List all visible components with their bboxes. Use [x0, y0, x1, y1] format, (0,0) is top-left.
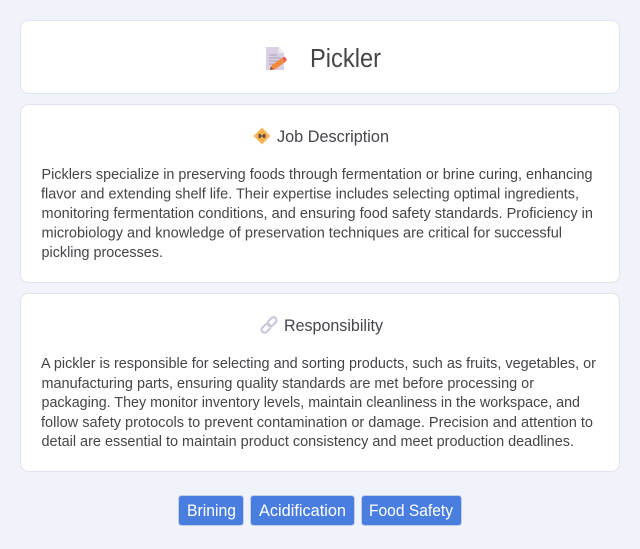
- heading: job description: Job Description: [277, 128, 389, 146]
- text block: job description: microbiology and knowledge of preservation techniques are critical for successful: [42, 226, 562, 242]
- text block: responsibility: packaging. They monitor inventory levels, maintain cleanliness in the workspace, and: [42, 395, 580, 411]
- tag: food safety: [362, 496, 462, 526]
- panel: job description: [20, 104, 620, 282]
- tag: food safety: Food Safety: [369, 501, 454, 520]
- text block: responsibility: [41, 356, 596, 450]
- text block: responsibility: detail are essential to maintain product consistency and meet production deadlines.: [42, 434, 574, 450]
- panel: title card: [20, 20, 620, 94]
- tag: brining: [178, 496, 244, 526]
- text block: job description: Picklers specialize in preserving foods through fermentation or brine curing, enhancing: [42, 167, 592, 183]
- tag: acidification: Acidification: [259, 501, 346, 520]
- panel: responsibility: [20, 294, 620, 472]
- tags row: [178, 496, 462, 526]
- icon: chain link: [260, 316, 278, 334]
- title: Pickler: [310, 45, 381, 73]
- heading: responsibility: Responsibility: [284, 317, 384, 335]
- tag: acidification: [250, 496, 354, 526]
- text block: responsibility: follow safety protocols to prevent contamination or damage. Precision and attention to: [41, 415, 593, 431]
- text block: job description: pickling processes.: [42, 245, 163, 261]
- text block: job description: flavor and extending shelf life. Their expertise includes selecting optimal ingredients,: [41, 186, 579, 202]
- text block: responsibility: manufacturing parts, ensuring quality standards are met before processing or: [42, 376, 534, 392]
- tag: brining: Brining: [187, 501, 236, 520]
- text block: responsibility: A pickler is responsible for selecting and sorting products, such as fruits, vegetables, or: [41, 356, 596, 372]
- icon: document with pencil: [266, 47, 287, 70]
- text block: job description: [41, 167, 593, 261]
- text block: job description: monitoring fermentation conditions, and ensuring food safety standards. Proficiency in: [42, 206, 593, 222]
- icon: orange diamond sign: [254, 128, 270, 144]
